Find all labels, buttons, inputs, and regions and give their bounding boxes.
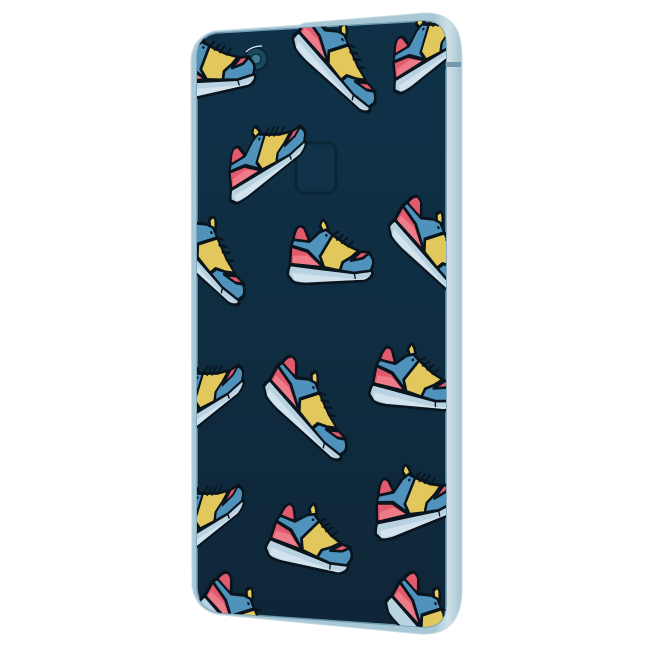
sneaker pattern	[197, 21, 446, 627]
right edge button seam	[447, 62, 461, 67]
sneaker 4	[228, 124, 307, 205]
sneaker 2	[292, 25, 377, 114]
sneaker 10	[262, 354, 348, 462]
case outer shell	[191, 13, 462, 634]
sneaker 13	[264, 502, 353, 575]
sneaker 1	[197, 38, 257, 99]
sneaker 11	[197, 483, 245, 548]
camera lens	[245, 46, 267, 70]
sneaker 8	[368, 342, 446, 412]
sneaker 14	[199, 570, 262, 616]
sneaker 7	[197, 215, 246, 306]
sneaker 3	[392, 21, 446, 95]
sneaker 5	[288, 220, 373, 284]
fingerprint sensor	[296, 143, 336, 193]
sneaker 6	[388, 194, 446, 290]
sneaker 9	[197, 363, 245, 428]
phone back panel	[197, 21, 446, 627]
phone case illustration	[190, 12, 462, 635]
top lighter band	[198, 22, 446, 78]
sneaker 12	[374, 463, 446, 542]
sneaker 15	[384, 570, 446, 627]
